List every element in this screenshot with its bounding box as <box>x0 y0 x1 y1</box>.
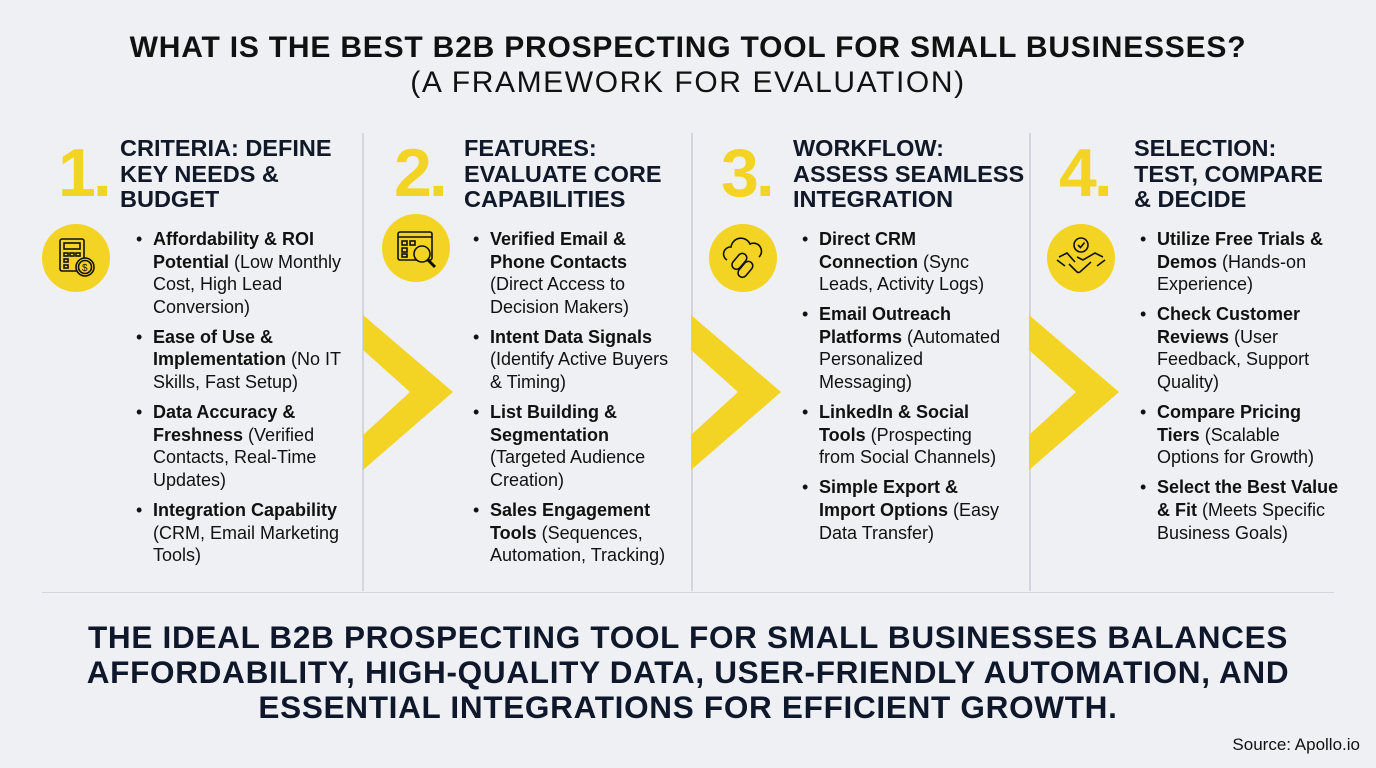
icon: handshake <box>1047 224 1115 292</box>
bullet list: Verified Email & <box>490 229 626 249</box>
conclusion text: AFFORDABILITY, HIGH-QUALITY DATA, USER-FRIENDLY AUTOMATION, AND <box>87 654 1289 690</box>
bullet list: List Building & <box>490 402 617 422</box>
panel: criteria <box>42 135 341 565</box>
bullet list: Skills, Fast Setup) <box>153 372 298 392</box>
bullet list: Phone Contacts <box>490 252 627 272</box>
bullet list: Updates) <box>153 470 226 490</box>
heading: ASSESS SEAMLESS <box>793 160 1024 186</box>
panel: workflow <box>709 135 1024 543</box>
bullet list: Email Outreach <box>819 304 951 324</box>
panel: features <box>382 135 668 565</box>
heading: FEATURES: <box>464 135 597 161</box>
bullet list: Integration Capability <box>153 500 337 520</box>
bullet list: Affordability & ROI <box>153 229 314 249</box>
heading: EVALUATE CORE <box>464 160 662 186</box>
bullet list: Check Customer <box>1157 304 1300 324</box>
bullet list: Tiers (Scalable <box>1157 425 1280 445</box>
bullet list: Reviews (User <box>1157 327 1278 347</box>
heading: CRITERIA: DEFINE <box>120 135 332 161</box>
conclusion text: ESSENTIAL INTEGRATIONS FOR EFFICIENT GROWTH. <box>258 689 1118 725</box>
bullet list: Personalized <box>819 349 923 369</box>
bullet list: Platforms (Automated <box>819 327 1000 347</box>
bullet list: Data Transfer) <box>819 523 934 543</box>
subtitle: (A FRAMEWORK FOR EVALUATION) <box>410 66 966 99</box>
bullet list: (Direct Access to <box>490 274 625 294</box>
heading: BUDGET <box>120 186 219 212</box>
panel: selection <box>1047 135 1338 543</box>
heading: WORKFLOW: <box>793 135 944 161</box>
bullet list: (Targeted Audience <box>490 447 645 467</box>
source: Source: Apollo.io <box>1232 735 1360 754</box>
bullet list: Intent Data Signals <box>490 327 652 347</box>
heading: SELECTION: <box>1134 135 1276 161</box>
bullet list: Tools (Prospecting <box>819 425 972 445</box>
bullet list: Business Goals) <box>1157 523 1288 543</box>
bullet list: Utilize Free Trials & <box>1157 229 1323 249</box>
bullet list: Freshness (Verified <box>153 425 314 445</box>
conclusion text <box>87 619 1289 725</box>
icon: search grid <box>382 214 450 282</box>
number 4: 4. <box>1059 135 1110 211</box>
bullet list: Sales Engagement <box>490 500 650 520</box>
heading <box>1134 135 1323 212</box>
bullet list: & Fit (Meets Specific <box>1157 500 1325 520</box>
bullet list: Potential (Low Monthly <box>153 252 341 272</box>
bullet list: Demos (Hands-on <box>1157 252 1306 272</box>
bullet list: Options for Growth) <box>1157 447 1314 467</box>
bullet list: Select the Best Value <box>1157 477 1338 497</box>
bullet list: Tools) <box>153 545 201 565</box>
bullet list: (Identify Active Buyers <box>490 349 668 369</box>
bullet list <box>136 229 341 565</box>
bullet list: from Social Channels) <box>819 447 996 467</box>
icon: calculator <box>42 224 110 292</box>
icon: calculator: $ <box>82 263 88 274</box>
number 1: 1. <box>58 135 109 211</box>
bullet list: Tools (Sequences, <box>490 523 643 543</box>
icon: cloud link <box>709 224 777 292</box>
bullet list <box>474 229 668 565</box>
bullet list: Connection (Sync <box>819 252 969 272</box>
bullet list <box>1140 229 1338 543</box>
bullet list: Compare Pricing <box>1157 402 1301 422</box>
heading: TEST, COMPARE <box>1134 160 1323 186</box>
heading <box>793 135 1024 212</box>
bullet list: Implementation (No IT <box>153 349 341 369</box>
bullet list: LinkedIn & Social <box>819 402 969 422</box>
bullet list: Cost, High Lead <box>153 274 282 294</box>
bullet list: Import Options (Easy <box>819 500 999 520</box>
bullet list: Feedback, Support <box>1157 349 1309 369</box>
heading <box>120 135 332 212</box>
heading: INTEGRATION <box>793 186 953 212</box>
bullet list: Segmentation <box>490 425 609 445</box>
title: WHAT IS THE BEST B2B PROSPECTING TOOL FOR SMALL BUSINESSES? <box>130 31 1246 64</box>
heading <box>464 135 662 212</box>
bullet list: Decision Makers) <box>490 297 629 317</box>
conclusion text: THE IDEAL B2B PROSPECTING TOOL FOR SMALL BUSINESSES BALANCES <box>88 619 1288 655</box>
bullet list: Automation, Tracking) <box>490 545 665 565</box>
bullet list: Simple Export & <box>819 477 958 497</box>
bullet list: Quality) <box>1157 372 1219 392</box>
bullet list: Direct CRM <box>819 229 916 249</box>
bullet list: Creation) <box>490 470 564 490</box>
bullet list: Experience) <box>1157 274 1253 294</box>
bullet list: Data Accuracy & <box>153 402 295 422</box>
bullet list: Ease of Use & <box>153 327 273 347</box>
heading: CAPABILITIES <box>464 186 625 212</box>
bullet list: Conversion) <box>153 297 250 317</box>
number 3: 3. <box>721 135 772 211</box>
heading: & DECIDE <box>1134 186 1246 212</box>
bullet list: Leads, Activity Logs) <box>819 274 984 294</box>
heading: KEY NEEDS & <box>120 160 279 186</box>
bullet list: & Timing) <box>490 372 566 392</box>
bullet list: Contacts, Real-Time <box>153 447 316 467</box>
bullet list <box>802 229 1000 543</box>
bullet list: Messaging) <box>819 372 912 392</box>
number 2: 2. <box>394 135 445 211</box>
bullet list: (CRM, Email Marketing <box>153 523 339 543</box>
